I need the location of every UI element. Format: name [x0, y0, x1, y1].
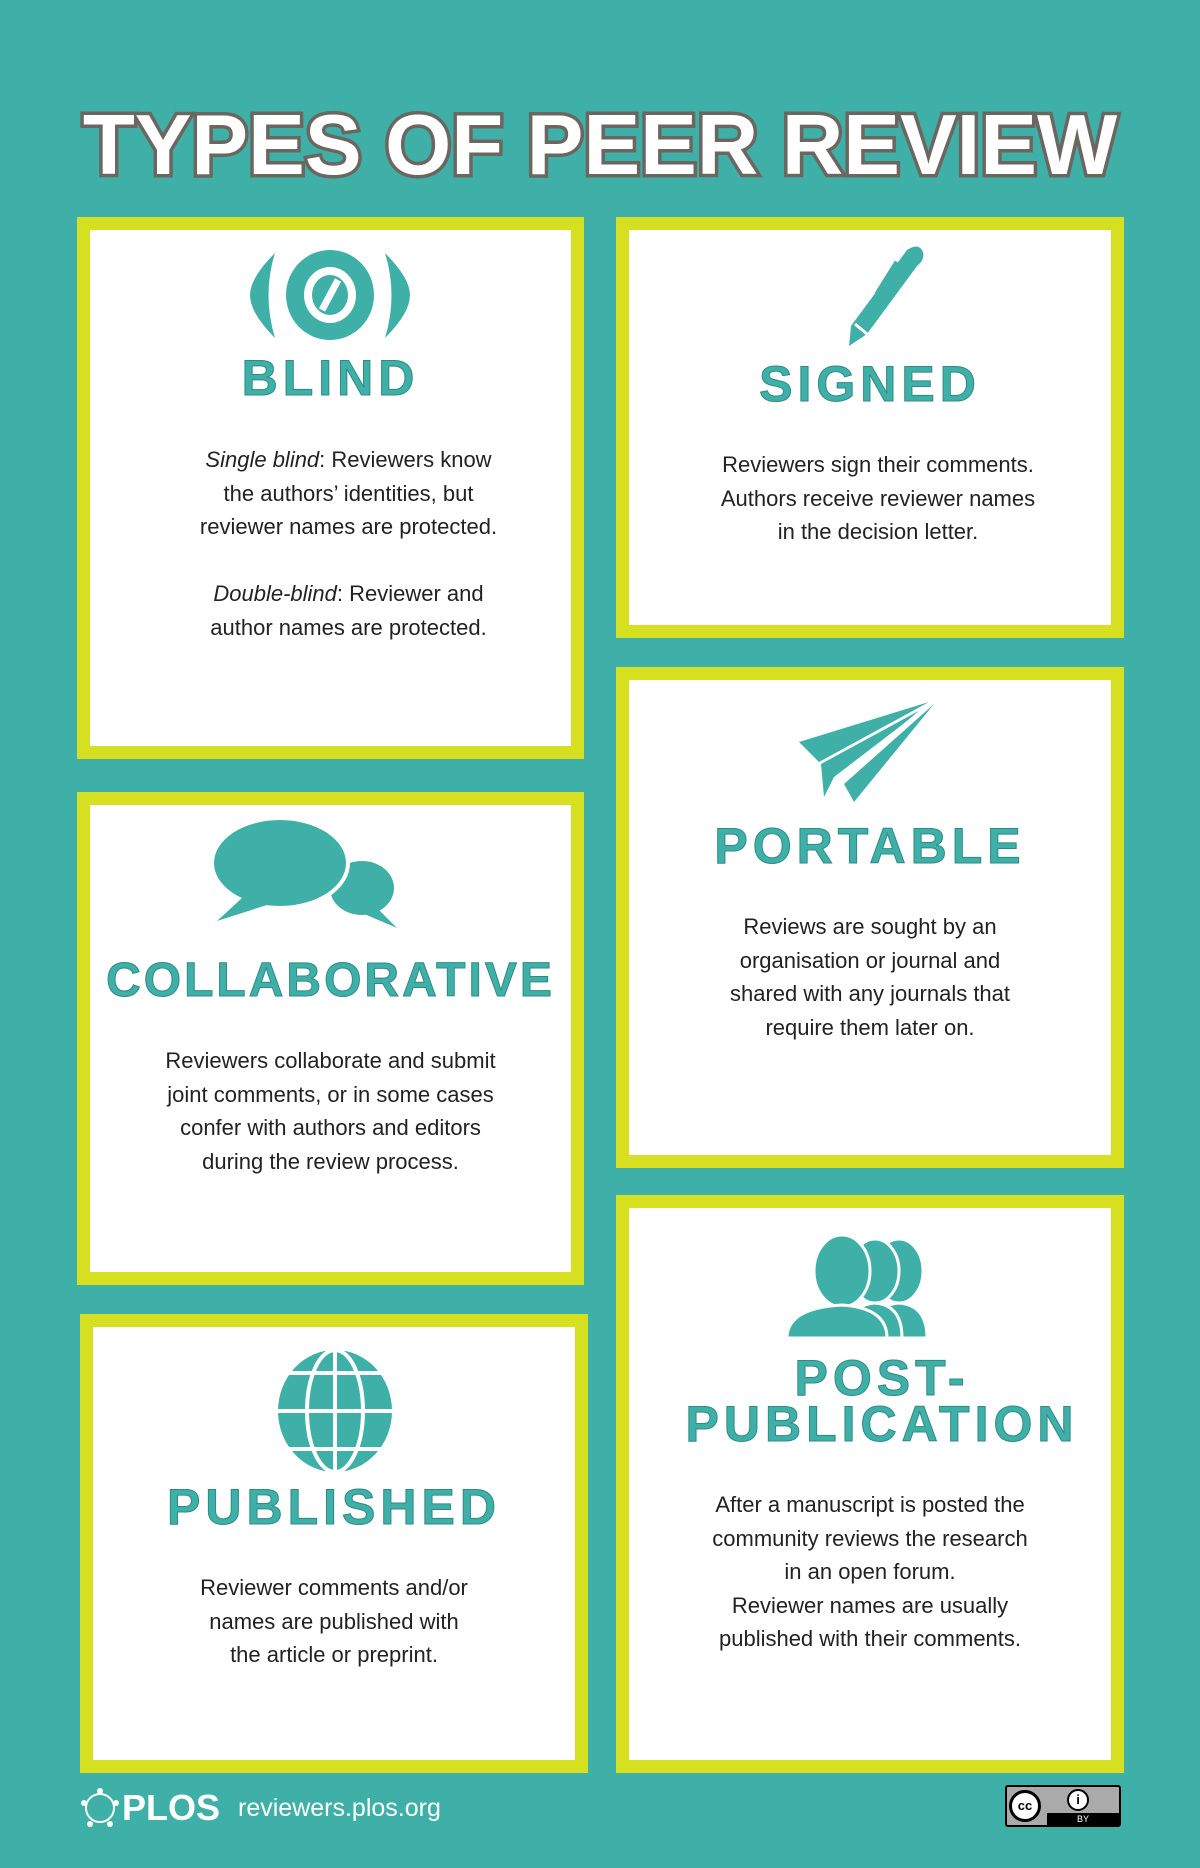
heading: blind: BLIND [242, 350, 419, 406]
text: signed: Reviewers sign their comments. [722, 452, 1034, 477]
license badge: CC BY [1005, 1785, 1121, 1827]
icon: pen [849, 246, 924, 346]
text: collaborative: confer with authors and editors [180, 1115, 481, 1140]
text: post-publication [712, 1492, 1028, 1651]
text: blind: Single blind: Reviewers know [205, 447, 492, 472]
text: published: names are published with [209, 1608, 459, 1634]
text: post-publication: community reviews the research [712, 1526, 1028, 1550]
text: published: Reviewer comments and/or [200, 1575, 468, 1600]
heading: post-publication: PUBLICATION [686, 1396, 1078, 1452]
license badge: CC BY: i [1076, 1792, 1080, 1807]
text: post-publication: published with their comments. [719, 1626, 1021, 1651]
panel: signed [616, 217, 1124, 638]
heading: signed: SIGNED [759, 356, 981, 412]
icon: eye [250, 250, 410, 340]
panel: blind [77, 217, 584, 759]
text: blind [200, 447, 497, 640]
heading: collaborative: COLLABORATIVE [106, 954, 555, 1007]
text: collaborative [165, 1048, 496, 1174]
text: published [200, 1575, 468, 1667]
panel: collaborative [77, 792, 584, 1285]
text: portable: require them later on. [765, 1014, 975, 1040]
heading: post-publication [686, 1350, 1078, 1452]
heading: published: PUBLISHED [167, 1479, 501, 1535]
heading: post-publication: POST- [794, 1350, 970, 1406]
icon: people [788, 1236, 926, 1336]
text: portable: Reviews are sought by an [743, 914, 997, 939]
footer logo: PLOS: reviewers.plos.org [238, 1794, 441, 1822]
panel: post-publication [616, 1195, 1124, 1773]
text: post-publication: in an open forum. [784, 1559, 956, 1584]
title: TYPES OF PEER REVIEW [83, 98, 1117, 193]
license badge: CC BY: BY [1077, 1814, 1089, 1824]
icon: globe [278, 1350, 392, 1472]
text: collaborative: during the review process. [202, 1148, 459, 1174]
icon: chat bubbles [214, 820, 397, 928]
text: portable: shared with any journals that [730, 981, 1010, 1006]
footer logo: PLOS: PLOS [122, 1787, 220, 1828]
text: signed [721, 452, 1035, 544]
panel: portable [616, 667, 1124, 1168]
text: blind: the authors’ identities, but [224, 480, 473, 506]
heading: portable: PORTABLE [714, 818, 1026, 874]
text: collaborative: joint comments, or in some cases [167, 1082, 494, 1106]
text: blind: reviewer names are protected. [200, 514, 497, 539]
panel: published [80, 1314, 588, 1773]
text: post-publication: After a manuscript is posted the [715, 1492, 1025, 1517]
text: published: the article or preprint. [230, 1642, 438, 1667]
text: portable: organisation or journal and [740, 948, 1000, 972]
license badge: CC BY: cc [1018, 1798, 1032, 1813]
text: portable [730, 914, 1010, 1040]
text: signed: in the decision letter. [778, 519, 978, 544]
text: collaborative: Reviewers collaborate and submit [165, 1048, 496, 1073]
text: signed: Authors receive reviewer names [721, 486, 1035, 510]
text: blind: author names are protected. [210, 614, 487, 640]
footer logo: PLOS [81, 1787, 441, 1828]
text: blind: Double-blind: Reviewer and [213, 581, 484, 606]
icon: paper plane [799, 702, 934, 802]
text: post-publication: Reviewer names are usually [732, 1592, 1008, 1618]
